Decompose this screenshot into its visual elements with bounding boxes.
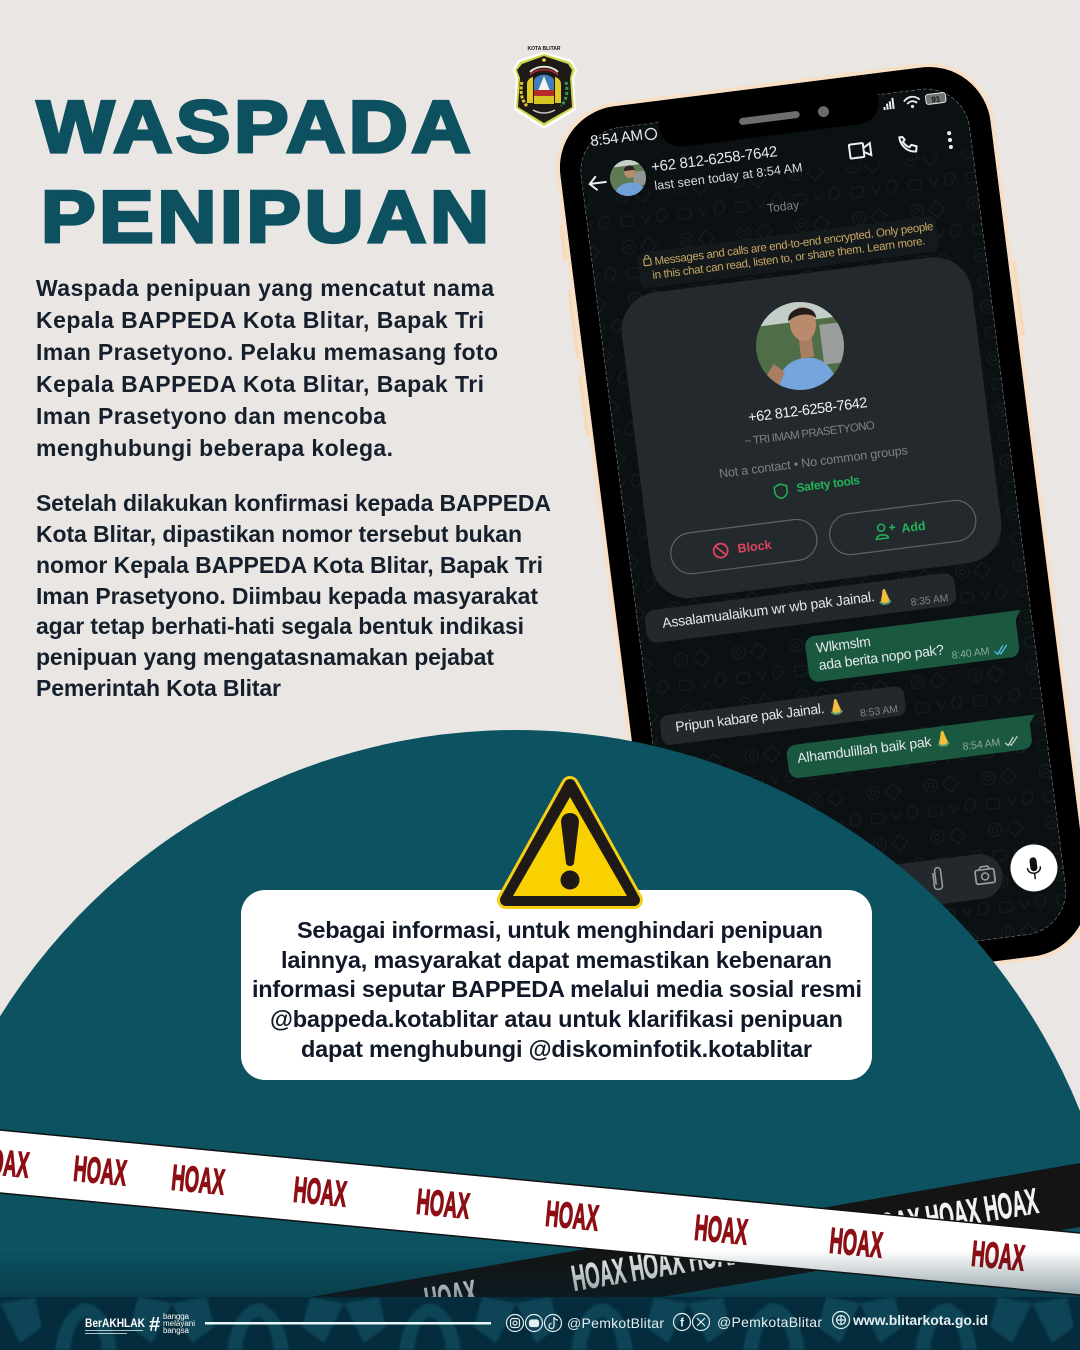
message input bar — [677, 851, 1005, 937]
callout: official channel information: lainnya, masyarakat dapat memastikan kebenaran — [281, 947, 832, 973]
white hoax tape: HOAX — [544, 1193, 601, 1239]
incoming message 1: 8:35 AM — [910, 592, 949, 609]
social handle: @PemkotaBlitar: @PemkotaBlitar — [717, 1314, 822, 1330]
safety tools link: Safety tools — [796, 473, 861, 495]
callout: official channel information: @bappeda.kotablitar atau untuk klarifikasi penipuan — [270, 1006, 843, 1032]
outgoing message 1: 8:40 AM — [951, 645, 990, 662]
text block: first paragraph — [36, 275, 498, 461]
title: WASPADA PENIPUAN — [37, 87, 489, 258]
title: WASPADA PENIPUAN: WASPADA — [37, 87, 470, 168]
contact info card: +62 812-6258-7642 — [747, 395, 868, 426]
white hoax tape — [0, 1130, 1080, 1295]
text block: first paragraph: Iman Prasetyono dan mencoba — [36, 403, 386, 429]
text block: first paragraph: Kepala BAPPEDA Kota Blitar, Bapak Tri — [36, 307, 484, 333]
BerAKHLAK logo — [85, 1312, 195, 1336]
emblem: Kota Blitar: KOTA BLITAR — [528, 46, 561, 52]
status bar: 91 — [931, 94, 941, 105]
callout: official channel information: Sebagai informasi, untuk menghindari penipuan — [297, 917, 823, 943]
incoming message 2: 8:53 AM — [859, 703, 899, 720]
text block: second paragraph: Pemerintah Kota Blitar — [36, 675, 281, 701]
social handle: @PemkotBlitar: @PemkotBlitar — [567, 1315, 664, 1331]
icon: warning triangle — [506, 785, 634, 900]
text block: first paragraph: Iman Prasetyono. Pelaku memasang foto — [36, 339, 498, 365]
text block: second paragraph: nomor Kepala BAPPEDA Kota Blitar, Bapak Tri — [36, 552, 543, 578]
encryption notice — [637, 215, 940, 289]
BerAKHLAK logo: bangga — [163, 1312, 190, 1321]
outgoing message 1 — [804, 610, 1026, 683]
add button — [827, 498, 978, 557]
outgoing message 2 — [786, 714, 1039, 779]
phone mockup with WhatsApp chat — [545, 57, 1080, 1006]
outgoing message 1: Wlkmslm — [815, 633, 872, 656]
white hoax tape: HOAX — [72, 1148, 129, 1194]
callout: official channel information — [241, 890, 872, 1080]
text block: second paragraph: Iman Prasetyono. Diimbau kepada masyarakat — [36, 583, 538, 609]
callout: official channel information: informasi seputar BAPPEDA melalui media sosial resmi — [252, 976, 862, 1002]
chat header: last seen today at 8:54 AM — [654, 160, 803, 193]
social handle: @PemkotaBlitar — [674, 1314, 822, 1330]
contact info card: Not a contact • No common groups — [718, 443, 908, 481]
incoming message 2 — [659, 685, 907, 746]
add button: Add — [900, 519, 926, 536]
chat header: +62 812-6258-7642 — [650, 143, 778, 176]
white hoax tape: HOAX — [170, 1157, 227, 1203]
text block: first paragraph: menghubungi beberapa kolega. — [36, 435, 393, 461]
footer bar — [0, 1297, 1080, 1350]
text block: second paragraph: Kota Blitar, dipastikan nomor tersebut bukan — [36, 521, 522, 547]
incoming message 2: Pripun kabare pak Jainal. — [674, 700, 825, 735]
outgoing message 1: ada berita nopo pak? — [818, 641, 945, 673]
text block: first paragraph: Kepala BAPPEDA Kota Blitar, Bapak Tri — [36, 371, 484, 397]
outgoing message 2: 8:54 AM — [962, 736, 1001, 753]
white hoax tape: HOAX — [693, 1207, 750, 1253]
emblem: Kota Blitar — [513, 46, 577, 129]
BerAKHLAK logo: bangsa — [163, 1326, 190, 1335]
social handle: @PemkotBlitar — [506, 1314, 664, 1332]
text block: first paragraph: Waspada penipuan yang mencatut nama — [36, 275, 494, 301]
phone notch — [658, 91, 881, 149]
status bar: 8:54 AM — [589, 127, 644, 150]
black hoax tape — [310, 1163, 1080, 1321]
white hoax tape: HOAX — [828, 1220, 885, 1266]
incoming message 1: Assalamualaikum wr wb pak Jainal. — [661, 588, 876, 631]
safety tools link — [774, 473, 861, 499]
black hoax tape: HOAX — [422, 1272, 480, 1321]
text block: second paragraph — [36, 490, 551, 701]
BerAKHLAK logo: BerAKHLAK — [85, 1318, 146, 1330]
BerAKHLAK logo: melayani — [163, 1319, 195, 1328]
encryption notice: Messages and calls are end-to-end encrypted. Only people — [654, 221, 934, 268]
black hoax tape: HOAX HOAX HOAX — [569, 1230, 745, 1299]
text block: second paragraph: agar tetap berhati-hati segala bentuk indikasi — [36, 613, 524, 639]
BerAKHLAK logo: # — [149, 1314, 160, 1336]
social handle: @PemkotaBlitar: f — [680, 1316, 685, 1330]
callout: official channel information: dapat menghubungi @diskominfotik.kotablitar — [301, 1036, 812, 1062]
microphone button — [1008, 842, 1060, 894]
contact info card: ~ TRI IMAM PRASETYONO — [744, 420, 876, 448]
outgoing message 2: Alhamdulillah baik pak — [796, 733, 933, 766]
text block: second paragraph: Setelah dilakukan konfirmasi kepada BAPPEDA — [36, 490, 551, 516]
contact info card — [617, 253, 1006, 603]
block button: Block — [737, 538, 772, 556]
status bar — [589, 88, 947, 150]
title: WASPADA PENIPUAN: PENIPUAN — [41, 177, 489, 258]
website address: www.blitarkota.go.id — [852, 1312, 988, 1328]
chat header — [588, 131, 953, 196]
incoming message 1 — [644, 572, 957, 644]
white hoax tape: HOAX — [292, 1169, 349, 1215]
date chip: Today: Today — [766, 198, 800, 215]
profile photo — [756, 302, 844, 390]
block button — [668, 517, 819, 576]
encryption notice: in this chat can read, listen to, or share them. Learn more. — [652, 236, 926, 282]
white hoax tape: HOAX — [415, 1181, 472, 1227]
text block: second paragraph: penipuan yang mengatasnamakan pejabat — [36, 644, 494, 670]
teal semicircle panel — [0, 730, 1080, 1350]
white hoax tape: HOAX — [970, 1233, 1027, 1279]
